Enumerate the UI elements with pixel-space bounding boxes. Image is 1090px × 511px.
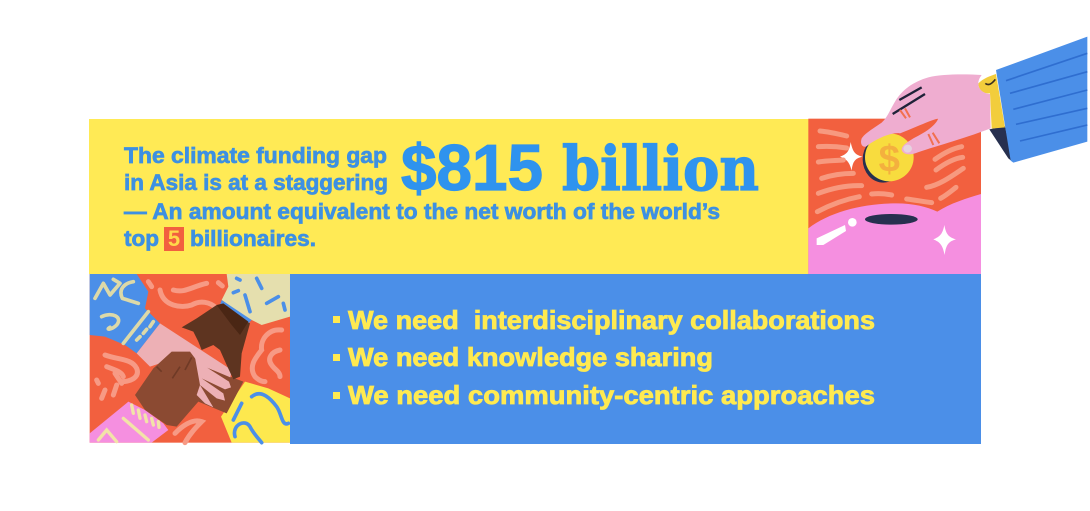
- list: what we need: We need interdisciplinary collaborations: [348, 305, 875, 335]
- dark brown hand: [182, 305, 250, 379]
- pattern on blue sleeve: [95, 279, 153, 343]
- illustration: joined hands panel: [90, 274, 290, 443]
- cuff button mark: [985, 79, 995, 85]
- piggy highlight: [817, 218, 857, 245]
- coin: [863, 133, 914, 183]
- highlighted number 5: 5: [168, 226, 180, 251]
- shirt cuff: [978, 74, 1005, 129]
- highlighted number 5: [164, 226, 184, 251]
- coin slot: [865, 214, 918, 225]
- illustration: hand dropping coin: [861, 37, 1087, 183]
- medium brown hand: [135, 352, 243, 427]
- list: what we need: We need knowledge sharing: [348, 342, 713, 372]
- text block: climate funding gap statement: top: [124, 226, 159, 251]
- piggy bank body: [808, 194, 981, 274]
- panel: yellow funding gap panel: [89, 119, 809, 274]
- heading: $815 billion: $815: [401, 131, 543, 204]
- knuckle marks: [893, 87, 939, 145]
- text block: climate funding gap statement: [124, 143, 720, 251]
- text block: climate funding gap statement: — An amount equivalent to the net worth of the world’s: [124, 199, 720, 224]
- pattern on pink sleeve: [98, 405, 159, 442]
- bullet 1: [333, 316, 340, 323]
- sleeve bottom-right yellow: [221, 382, 290, 443]
- bullet 3: [333, 392, 340, 399]
- sleeve cuff dark: [989, 126, 1012, 162]
- hand: [861, 74, 991, 154]
- motion strokes: [817, 131, 963, 212]
- panel: blue needs panel: [290, 274, 981, 444]
- sleeve top-left blue: [90, 274, 160, 353]
- pattern on yellow sleeve: [233, 394, 288, 443]
- illustration: piggy bank and coin panel: [808, 119, 981, 274]
- pink arm: [137, 323, 232, 370]
- list: what we need: [333, 305, 875, 410]
- text block: climate funding gap statement: billionaires.: [190, 226, 316, 251]
- sparkles: [840, 142, 956, 255]
- fingernail: [903, 145, 912, 153]
- list: what we need: We need community-centric approaches: [348, 380, 875, 410]
- pattern on cream sleeve: [233, 278, 285, 312]
- bullet 2: [333, 354, 340, 361]
- sleeve stripes: [1006, 53, 1087, 141]
- finger gaps on brown hand: [157, 357, 192, 378]
- red sleeve swirls: [97, 282, 282, 443]
- text block: climate funding gap statement: in Asia is at a staggering: [124, 170, 388, 195]
- sleeve: [996, 37, 1087, 163]
- heading: $815 billion: billion: [562, 134, 759, 205]
- heading: $815 billion: [401, 131, 759, 205]
- coin: $: [879, 138, 900, 181]
- blue cuff edge: [220, 300, 252, 323]
- dark brown shade: [217, 303, 248, 335]
- text block: climate funding gap statement: The climate funding gap: [124, 143, 387, 168]
- sleeve top-right cream: [222, 274, 290, 325]
- pink fingers: [195, 357, 232, 407]
- sleeve bottom-left pink: [90, 402, 168, 443]
